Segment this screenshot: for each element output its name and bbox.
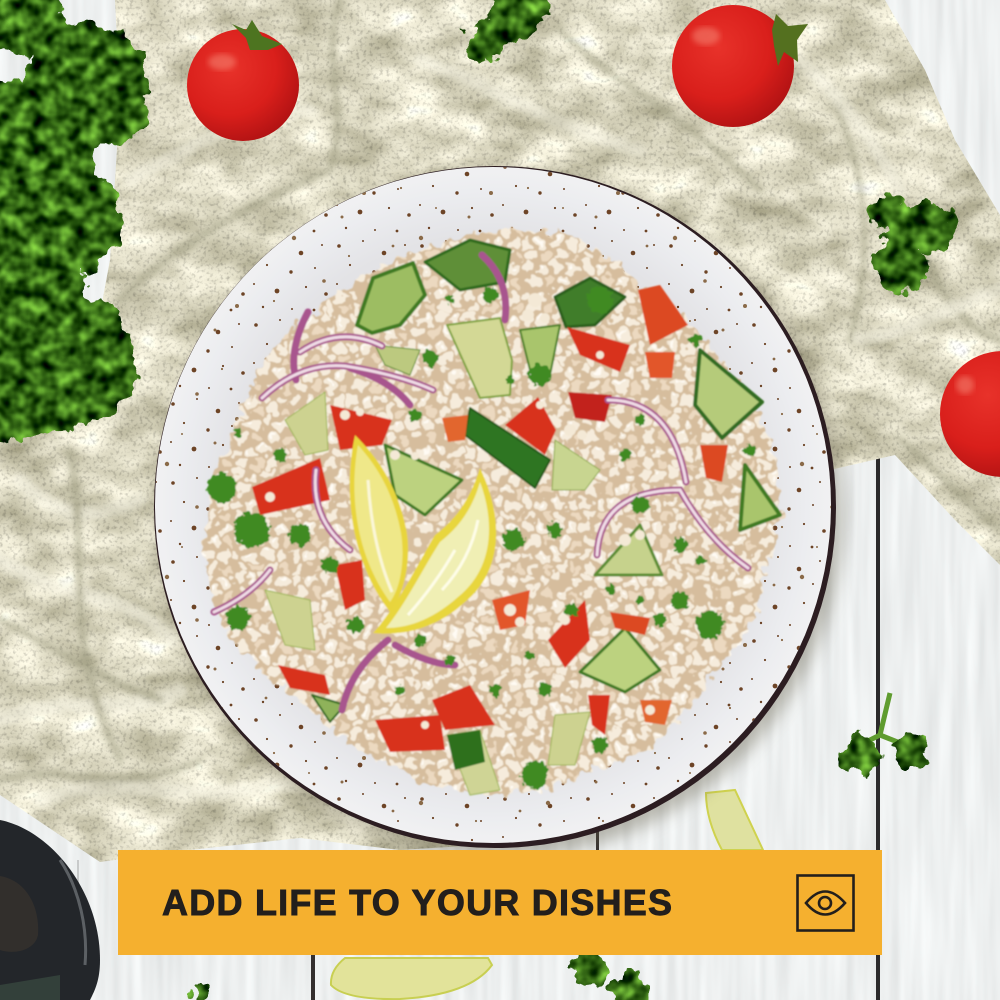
parsley, bottom centre [570,950,648,1000]
parsley, bottom left [190,984,210,1000]
speckled bowl [154,166,843,858]
couscous grains over pieces [265,293,655,729]
orange banner [118,850,882,955]
red onion slices [214,255,748,710]
lime wedge, leaning [373,468,496,634]
parsley sprig, right [872,195,954,294]
lime wedge, bottom [331,958,492,999]
tomato, right edge [940,351,1000,477]
icon: eye in a frame [798,876,854,930]
salad [205,230,780,795]
chopped herbs [207,287,756,789]
bottle, bottom left [0,820,100,1000]
lemon wedge, upright [350,435,408,612]
lemon slice, lower right [706,790,763,850]
cucumber pieces [265,240,780,795]
tomato, top left [187,20,299,141]
parsley sprig, top centre [465,0,551,62]
tomato, top right [672,5,808,127]
couscous mound [205,230,779,793]
banner heading: ADD LIFE TO YOUR DISHES [162,882,672,923]
parsley sprig with stem, lower right [841,693,927,774]
tomato pieces [252,285,728,752]
parsley bunch, top left [0,0,148,441]
